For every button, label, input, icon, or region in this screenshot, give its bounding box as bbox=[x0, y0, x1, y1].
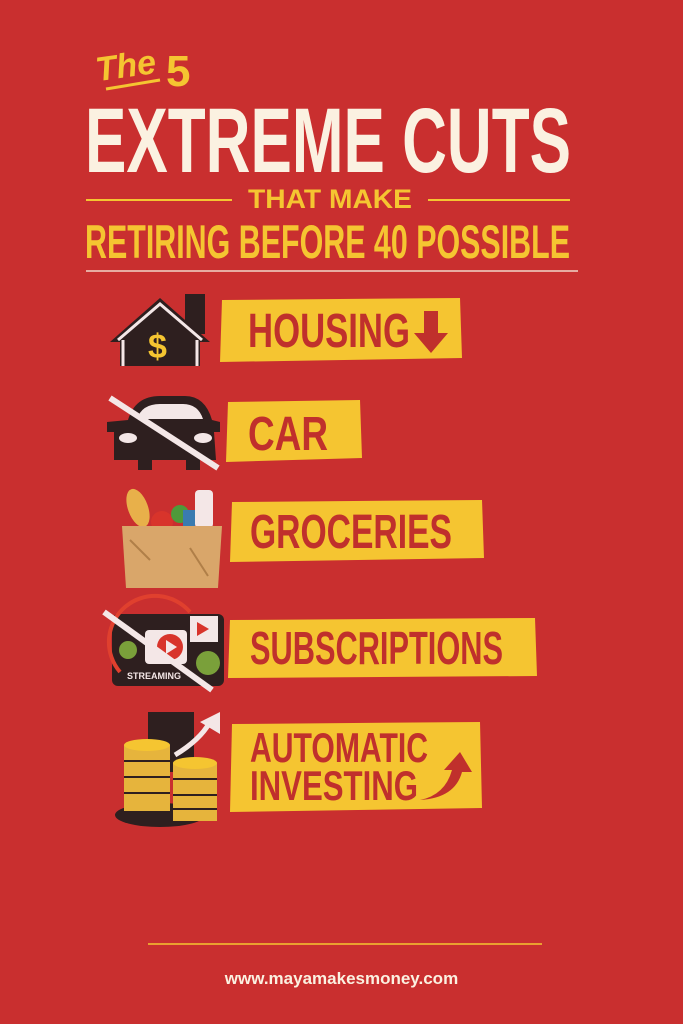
icon: crossed-out car bbox=[107, 396, 220, 470]
icon: crossed-out streaming bbox=[104, 596, 224, 690]
label: AUTOMATIC INVESTING: INVESTING bbox=[250, 762, 418, 809]
icon: crossed-out streaming: STREAMING bbox=[127, 671, 181, 681]
icon: grocery bag bbox=[122, 486, 222, 588]
label: GROCERIES bbox=[230, 500, 484, 562]
label: HOUSING: HOUSING bbox=[248, 305, 410, 358]
label: CAR bbox=[226, 400, 362, 462]
label: AUTOMATIC INVESTING bbox=[230, 722, 482, 812]
label: GROCERIES: GROCERIES bbox=[250, 506, 452, 559]
icon: house with dollar bbox=[110, 294, 210, 366]
label: SUBSCRIPTIONS: SUBSCRIPTIONS bbox=[250, 622, 503, 674]
subtitle: THAT MAKE: THAT MAKE bbox=[248, 184, 412, 214]
icon: coin stacks with arrow bbox=[115, 712, 220, 827]
label: SUBSCRIPTIONS bbox=[228, 618, 537, 678]
title: The 5 bbox=[93, 43, 190, 96]
footer url: www.mayamakesmoney.com bbox=[224, 969, 458, 988]
icon: house with dollar: $ bbox=[148, 328, 167, 366]
label: AUTOMATIC INVESTING: AUTOMATIC bbox=[250, 724, 428, 771]
title: The 5: 5 bbox=[166, 47, 190, 96]
title: The 5: The bbox=[93, 43, 158, 89]
label: CAR: CAR bbox=[248, 408, 328, 461]
